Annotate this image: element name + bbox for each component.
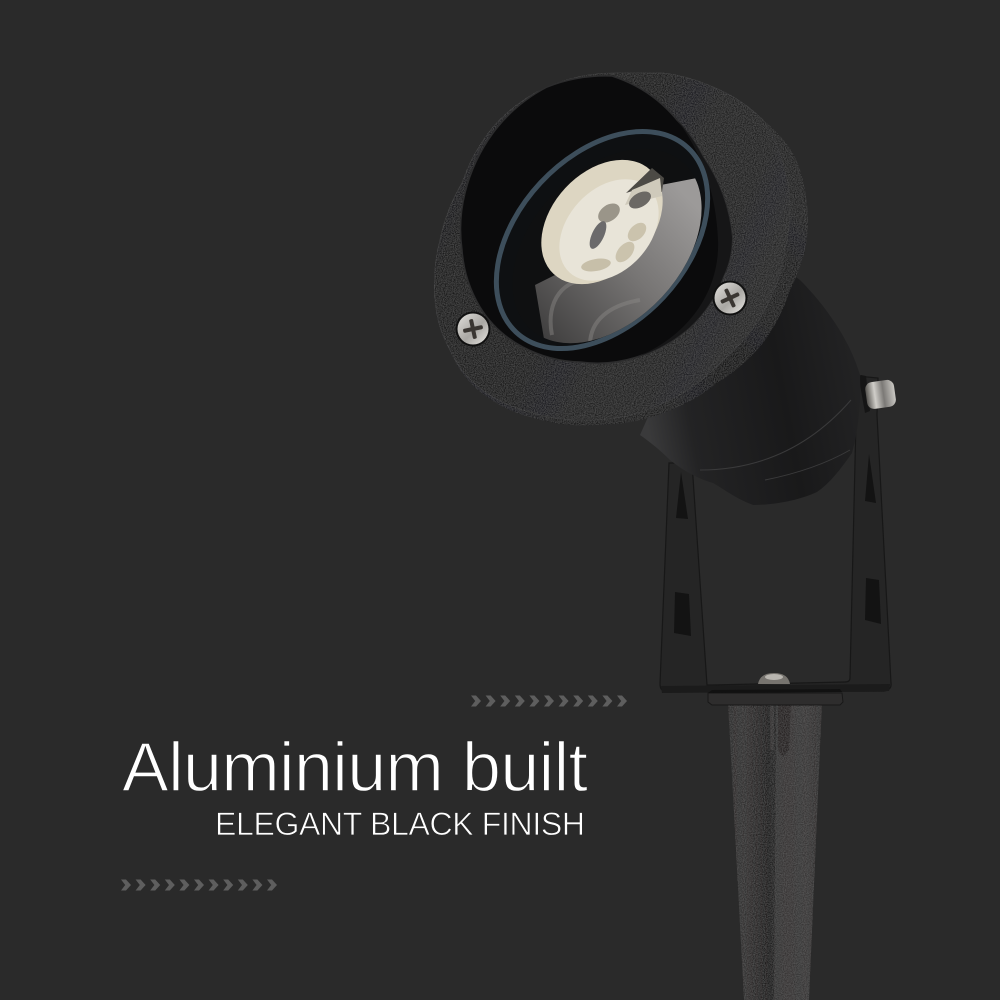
spotlight head: [434, 73, 808, 425]
title: Aluminium built: [122, 728, 588, 806]
infographic canvas: [121, 72, 896, 1000]
side bolt: [859, 375, 897, 413]
lamp socket: [517, 136, 687, 308]
ground spike: [728, 703, 822, 1000]
bracket slots: [674, 454, 881, 636]
front flange ring: [434, 73, 790, 420]
inner wall on right: [637, 120, 732, 357]
rear flange: [434, 73, 808, 425]
spotlight barrel: [640, 250, 860, 505]
top chevron row: [471, 696, 627, 706]
lens reflection: [535, 178, 702, 344]
glass lens: [535, 178, 702, 344]
rubber gasket: [455, 91, 749, 389]
screw left: [456, 312, 490, 346]
subtitle: ELEGANT BLACK FINISH: [215, 806, 585, 842]
screw right: [712, 280, 748, 316]
barrel seam: [700, 400, 851, 480]
socket holes: [580, 188, 654, 274]
spike mounting plate and screw: [708, 673, 843, 705]
mounting bracket: [660, 376, 891, 693]
bottom chevron row: [121, 880, 277, 890]
ring inner opening: [461, 76, 732, 363]
